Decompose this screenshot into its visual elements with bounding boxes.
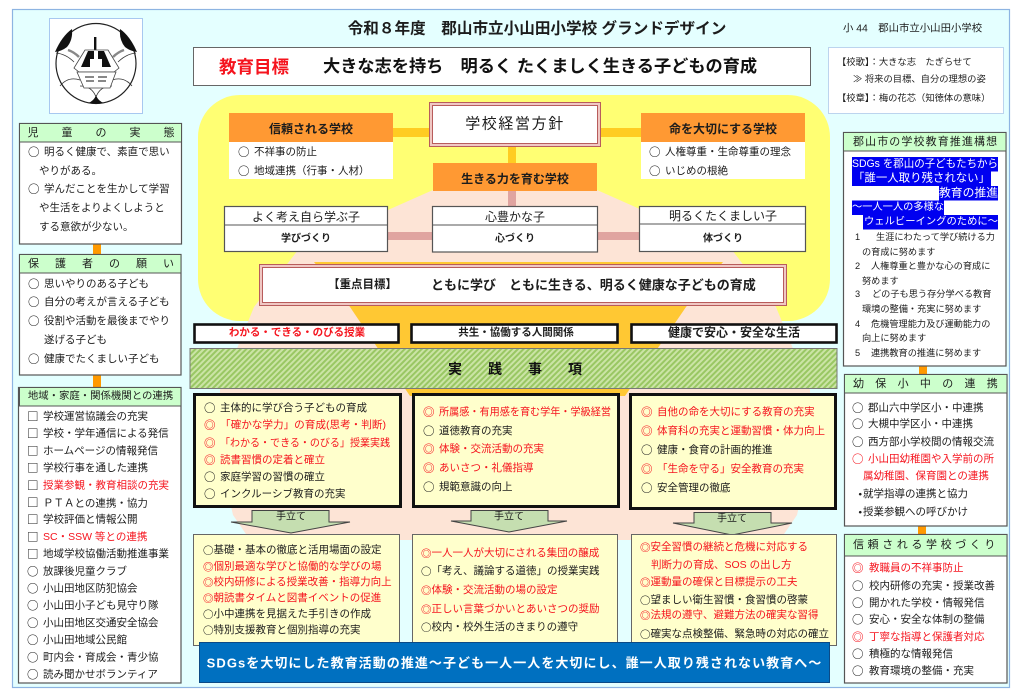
panel: community cooperation: 地域・家庭・関係機関との連携 xyxy=(28,389,173,402)
panel: Koriyama education vision: 郡山市の学校教育推進構想 xyxy=(853,134,998,148)
panel: Koriyama education vision: 人権尊重と豊かな心の育成に xyxy=(871,260,990,271)
panel: trusted school: ○ xyxy=(238,144,250,160)
panel: community cooperation: 小山田小子ども見守り隊 xyxy=(43,599,159,612)
panel: building a trusted school: 教職員の不祥事防止 xyxy=(869,561,964,574)
panel: practice column 2: 道徳教育の充実 xyxy=(439,424,513,437)
panel: preschool to junior high cooperation xyxy=(844,374,1009,526)
panel: practice column 2: 規範意識の向上 xyxy=(439,480,512,493)
panel: measures column 1: ◎個別最適な学びと協働的な学びの場 xyxy=(203,559,382,574)
child box: body: 体づくり xyxy=(703,232,743,244)
panel: community cooperation xyxy=(18,388,181,683)
arrow: measures 1 xyxy=(231,510,350,533)
panel: building a trusted school: 丁寧な指導と保護者対応 xyxy=(869,630,985,643)
panel: building a trusted school: ○ xyxy=(852,612,864,628)
panel: preschool to junior high cooperation: 属幼稚園、保育園との連携 xyxy=(863,469,989,482)
panel: practice column 1: ○ xyxy=(204,486,216,502)
panel: community cooperation: □ xyxy=(27,529,38,545)
panel: practice column 3: ◎ xyxy=(641,423,652,439)
panel: Koriyama education vision xyxy=(844,132,1006,366)
practice items band: 実践事項 xyxy=(448,361,608,377)
SDGs banner: SDGsを大切にした教育活動の推進～子ども一人一人を大切にし、誰一人取り残されない教育へ～ xyxy=(207,656,822,670)
panel: community cooperation: ○ xyxy=(27,580,38,596)
practice items band xyxy=(190,348,837,388)
panel: practice column 1: 主体的に学び合う子どもの育成 xyxy=(220,401,367,414)
panel: building a trusted school: 安心・安全な体制の整備 xyxy=(869,612,985,626)
panel: practice column 1: ◎ xyxy=(204,452,216,468)
child box: heart xyxy=(432,206,598,252)
panel: measures column 2: ◎正しい言葉づかいとあいさつの奨励 xyxy=(421,602,600,616)
panel: parents' wishes: 遂げる子ども xyxy=(44,334,107,346)
panel: measures column 2: ○校内・校外生活のきまりの遵守 xyxy=(421,620,578,634)
panel: parents' wishes: ○ xyxy=(28,313,40,329)
SDGs highlighted statement: ～一人一人の多様な xyxy=(852,200,944,213)
panel: Koriyama education vision: 向上に努めます xyxy=(862,332,926,343)
panel: community cooperation: □ xyxy=(27,546,38,562)
panel: practice column 2: ◎ xyxy=(423,404,434,420)
panel: community cooperation: 読み聞かせボランティア xyxy=(43,668,158,680)
arrow: measures 1: 手立て xyxy=(276,510,306,522)
panel: measures column 1: ○特別支援教育と個別指導の充実 xyxy=(203,622,361,638)
background: gold arrow shape xyxy=(314,262,723,396)
label: relationships: 共生・協働する人間関係 xyxy=(458,326,574,338)
panel: children's current state: 児童の実態 xyxy=(28,126,198,139)
panel: community cooperation: □ xyxy=(27,460,38,476)
panel: practice column 2: あいさつ・礼儀指導 xyxy=(439,461,534,474)
panel: practice column 3: 体育科の充実と運動習慣・体力向上 xyxy=(657,424,825,437)
panel: parents' wishes: 自分の考えが言える子ども xyxy=(44,295,170,308)
panel: community cooperation: ○ xyxy=(27,649,38,665)
panel: community cooperation: 学校運営協議会の充実 xyxy=(43,410,148,422)
child box: body xyxy=(640,206,806,252)
panel: trusted school: 不祥事の防止 xyxy=(254,145,317,158)
SDGs highlighted statement: 教育の推進 xyxy=(939,186,998,200)
panel: community cooperation: 授業参観・教育相談の充実 xyxy=(43,478,169,491)
panel: practice column 3: ○ xyxy=(641,480,652,496)
panel: children's current state: やりがある。 xyxy=(39,164,102,177)
panel: practice column 3: 健康・食育の計画的推進 xyxy=(657,443,773,456)
panel: community cooperation: 学校評価と情報公開 xyxy=(43,513,138,526)
panel: practice column 2: 所属感・有用感を育む学年・学級経営 xyxy=(439,405,611,418)
title: 令和８年度 郡山市立小山田小学校 グランドデザイン xyxy=(348,18,726,38)
panel: Koriyama education vision: 1 xyxy=(855,232,860,242)
panel: children's current state: ○ xyxy=(28,144,40,160)
panel: school valuing life: ○ xyxy=(649,163,660,179)
panel: measures column 1: ◎校内研修による授業改善・指導力向上 xyxy=(203,574,392,590)
panel: practice column 3: ○ xyxy=(641,442,652,458)
panel: practice column 3: ◎ xyxy=(641,461,652,477)
panel: school nurturing zest for living xyxy=(433,163,597,191)
school emblem xyxy=(50,18,142,114)
panel: practice column 3 xyxy=(630,394,836,508)
panel: community cooperation: ○ xyxy=(27,615,38,631)
panel: measures column 3: ○確実な点検整備、緊急時の対応の確立 xyxy=(640,626,829,642)
panel: building a trusted school: ◎ xyxy=(852,629,864,645)
connectors: left panels xyxy=(93,244,101,387)
label: learning: わかる・できる・のびる授業 xyxy=(229,326,366,338)
panel: practice column 2: ○ xyxy=(423,479,434,495)
child box: learning xyxy=(224,206,388,252)
SDGs highlighted statement xyxy=(852,157,998,230)
panel: community cooperation: 小山田地区防犯協会 xyxy=(43,582,138,594)
label: safe life: 健康で安心・安全な生活 xyxy=(668,324,800,340)
panel: community cooperation: 放課後児童クラブ xyxy=(43,564,127,577)
panel: parents' wishes: ○ xyxy=(28,351,40,367)
panel: measures column 3: 判断力の育成、SOS の出し方 xyxy=(651,558,792,571)
panel: measures column 3: ◎運動量の確保と目標提示の工夫 xyxy=(640,574,798,590)
panel: children's current state: ○ xyxy=(28,181,40,197)
panel: practice column 1: ○ xyxy=(204,469,216,485)
panel: Koriyama education vision: 環境の整備・充実に努めます xyxy=(862,303,981,314)
panel: building a trusted school: ◎ xyxy=(852,560,864,576)
panel: building a trusted school: ○ xyxy=(852,578,864,594)
panel: measures column 1: ◎朝読書タイムと図書イベントの促進 xyxy=(203,590,382,606)
panel: measures column 3: ◎安全習慣の継続と危機に対応する xyxy=(640,540,808,554)
panel: building a trusted school xyxy=(844,534,1007,683)
background: yellow rounded area xyxy=(198,95,830,321)
school song and emblem note: 【校章】：梅の花芯（知徳体の意味） xyxy=(837,92,990,103)
priority goal: ともに学び ともに生きる、明るく健康な子どもの育成 xyxy=(431,278,756,292)
label: safe life xyxy=(632,324,836,342)
panel: practice column 1: 家庭学習の習慣の確立 xyxy=(220,470,325,483)
panel: community cooperation: 小山田地区交通安全協会 xyxy=(43,616,159,629)
panel: trusted school: 信頼される学校 xyxy=(269,121,353,136)
panel: practice column 1: ○ xyxy=(204,400,216,416)
panel: preschool to junior high cooperation: 幼保小中の連携 xyxy=(853,376,1009,390)
panel: Koriyama education vision: 連携教育の推進に努めます xyxy=(871,347,981,358)
panel: parents' wishes: 役割や活動を最後までやり xyxy=(44,314,170,327)
panel: community cooperation: ホームページの情報発信 xyxy=(43,444,158,457)
panel: Koriyama education vision: 生涯にわたって学び続ける力 xyxy=(876,231,995,242)
panel: building a trusted school: 信頼される学校づくり xyxy=(853,537,999,551)
panel: community cooperation: ○ xyxy=(27,598,38,614)
connectors: right panels xyxy=(918,366,927,535)
panel: Koriyama education vision: どの子も思う存分学べる教育 xyxy=(872,288,991,299)
child box: heart: 心づくり xyxy=(495,232,535,244)
panel: community cooperation: □ xyxy=(27,426,38,442)
school management policy: 学校経営方針 xyxy=(465,116,565,132)
educational goal box xyxy=(194,48,810,86)
panel: measures column 2: ◎一人一人が大切にされる集団の醸成 xyxy=(421,546,600,560)
panel: preschool to junior high cooperation: 小山田幼稚園や入学前の所 xyxy=(868,452,994,465)
panel: preschool to junior high cooperation: 郡山六中学区小・中連携 xyxy=(868,401,984,414)
panel: practice column 2: ◎ xyxy=(423,460,434,476)
connectors: child boxes xyxy=(387,191,640,240)
panel: practice column 1: ◎ xyxy=(204,417,216,433)
SDGs highlighted statement: ウェルビーイングのために～ xyxy=(864,214,998,228)
educational goal box: 大きな志を持ち 明るく たくましく生きる子どもの育成 xyxy=(323,56,757,76)
panel: parents' wishes: 健康でたくましい子ども xyxy=(44,352,160,365)
educational goal box: 教育目標 xyxy=(219,57,289,77)
panel: measures column 1: ○小中連携を見据えた手引きの作成 xyxy=(203,606,371,622)
priority goal xyxy=(260,264,786,306)
panel: parents' wishes xyxy=(20,254,190,375)
panel: practice column 1: 読書習慣の定着と確立 xyxy=(220,453,325,466)
arrow: measures 2 xyxy=(451,510,567,532)
panel: preschool to junior high cooperation: 大槻中学区小・中連携 xyxy=(868,417,973,430)
panel: community cooperation: 地域学校協働活動推進事業 xyxy=(43,547,169,560)
label: relationships xyxy=(412,324,618,342)
panel: community cooperation: ○ xyxy=(27,632,38,648)
panel: children's current state: する意欲が少ない。 xyxy=(39,220,134,233)
panel: community cooperation: □ xyxy=(27,443,38,459)
panel: measures column 3 xyxy=(632,534,836,646)
panel: Koriyama education vision: 2 xyxy=(855,261,860,271)
panel: measures column 1 xyxy=(194,534,400,646)
label: learning xyxy=(194,324,398,342)
panel: Koriyama education vision: 5 xyxy=(855,348,860,358)
panel: building a trusted school: 教育環境の整備・充実 xyxy=(869,664,974,677)
panel: building a trusted school: 校内研修の充実・授業改善 xyxy=(869,579,995,592)
panel: building a trusted school: 開かれた学校・情報発信 xyxy=(869,596,985,609)
panel: preschool to junior high cooperation: ・ xyxy=(855,486,866,502)
school song and emblem note: ≫ 将来の目標、自分の理想の姿 xyxy=(853,73,986,84)
panel: practice column 3: 安全管理の徹底 xyxy=(657,481,731,494)
panel: community cooperation: 学校・学年通信による発信 xyxy=(43,427,169,440)
panel: preschool to junior high cooperation: 西方部小学校間の情報交流 xyxy=(868,435,994,448)
school song and emblem note xyxy=(828,48,1004,114)
panel: community cooperation: 町内会・育成会・青少協 xyxy=(43,650,158,663)
panel: parents' wishes: 思いやりのある子ども xyxy=(44,278,149,290)
panel: community cooperation: ＰＴＡとの連携・協力 xyxy=(43,495,148,510)
panel: Koriyama education vision: 4 xyxy=(855,319,860,329)
panel: community cooperation: 学校行事を通した連携 xyxy=(43,461,148,474)
panel: preschool to junior high cooperation: ○ xyxy=(852,434,864,450)
panel: trusted school: 地域連携（行事・人材） xyxy=(254,164,370,177)
school code: 小 44 郡山市立小山田小学校 xyxy=(843,22,983,34)
child box: learning: 学びづくり xyxy=(281,232,331,244)
panel: practice column 1: 「わかる・できる・のびる」授業実践 xyxy=(220,436,390,449)
panel: measures column 2: ○「考え、議論する道徳」の授業実践 xyxy=(421,564,600,578)
panel: practice column 1: インクルーシブ教育の充実 xyxy=(220,487,346,500)
panel: community cooperation: □ xyxy=(27,512,38,528)
arrow: measures 3: 手立て xyxy=(717,512,747,524)
panel: Koriyama education vision: 努めます xyxy=(862,275,899,286)
arrow: measures 2: 手立て xyxy=(494,510,524,522)
panel: parents' wishes: ○ xyxy=(28,294,40,310)
panel: practice column 3: 「生命を守る」安全教育の充実 xyxy=(657,462,804,475)
panel: measures column 1: ○基礎・基本の徹底と活用場面の設定 xyxy=(203,542,382,558)
panel: children's current state xyxy=(20,124,198,244)
panel: preschool to junior high cooperation: ○ xyxy=(852,416,864,432)
panel: school valuing life: いじめの根絶 xyxy=(665,164,728,177)
panel: children's current state: 学んだことを生かして学習 xyxy=(44,182,170,195)
panel: practice column 3: 自他の命を大切にする教育の充実 xyxy=(657,405,815,418)
panel: practice column 3: ◎ xyxy=(641,404,652,420)
panel: practice column 2: ◎ xyxy=(423,441,434,457)
panel: practice column 1: 「確かな学力」の育成(思考・判断) xyxy=(220,418,386,431)
panel: community cooperation: □ xyxy=(27,494,38,510)
panel: practice column 2 xyxy=(414,394,618,506)
child box: body: 明るくたくましい子 xyxy=(669,209,777,223)
panel: Koriyama education vision: 危機管理能力及び運動能力の xyxy=(871,318,990,329)
connectors: school policy xyxy=(393,128,642,164)
panel: practice column 2: 体験・交流活動の充実 xyxy=(439,442,544,455)
panel: building a trusted school: ○ xyxy=(852,646,864,662)
panel: children's current state: 明るく健康で、素直で思い xyxy=(44,145,170,158)
child box: learning: よく考え自ら学ぶ子 xyxy=(252,209,360,224)
panel: practice column 2: ○ xyxy=(423,423,434,439)
panel: measures column 3: ◎法規の遵守、避難方法の確実な習得 xyxy=(640,608,818,622)
arrow: measures 3 xyxy=(673,512,792,535)
panel: parents' wishes: 保護者の願い xyxy=(28,256,190,270)
panel: preschool to junior high cooperation: ・ xyxy=(855,504,866,520)
panel: measures column 3: ○望ましい衛生習慣・食習慣の啓蒙 xyxy=(640,592,808,608)
panel: building a trusted school: ○ xyxy=(852,595,864,611)
panel: trusted school xyxy=(229,113,393,179)
panel: trusted school: ○ xyxy=(238,163,250,179)
panel: practice column 1: ◎ xyxy=(204,435,216,451)
panel: Koriyama education vision: の育成に努めます xyxy=(862,246,936,257)
panel: community cooperation: 小山田地域公民館 xyxy=(43,633,127,646)
school management policy xyxy=(430,102,600,146)
panel: school valuing life xyxy=(641,113,805,179)
priority goal: 【重点目標】 xyxy=(328,277,397,291)
panel: community cooperation: □ xyxy=(27,477,38,493)
panel: preschool to junior high cooperation: ○ xyxy=(852,451,864,467)
SDGs highlighted statement: SDGs を郡山の子どもたちから xyxy=(852,158,998,170)
panel: community cooperation: □ xyxy=(27,408,38,424)
panel: preschool to junior high cooperation: ○ xyxy=(852,400,864,416)
school song and emblem note: 【校歌】：大きな志 たぎらせて xyxy=(837,56,972,67)
panel: building a trusted school: ○ xyxy=(852,663,864,679)
panel: school valuing life: 命を大切にする学校 xyxy=(669,121,777,136)
panel: preschool to junior high cooperation: 授業参観への呼びかけ xyxy=(863,505,968,518)
panel: Koriyama education vision: 3 xyxy=(855,289,860,299)
panel: building a trusted school: 積極的な情報発信 xyxy=(869,647,953,660)
SDGs banner xyxy=(200,642,830,682)
panel: preschool to junior high cooperation: 就学指導の連携と協力 xyxy=(863,487,968,500)
panel: school nurturing zest for living: 生きる力を育む学校 xyxy=(461,171,569,186)
panel: community cooperation: SC・SSW 等との連携 xyxy=(43,530,147,543)
panel: school valuing life: 人権尊重・生命尊重の理念 xyxy=(665,145,791,158)
child box: heart: 心豊かな子 xyxy=(485,210,545,224)
panel: community cooperation: ○ xyxy=(27,563,38,579)
SDGs highlighted statement: 「誰一人取り残されない」 xyxy=(853,170,990,184)
panel: community cooperation: ○ xyxy=(27,666,38,682)
panel: measures column 2: ◎体験・交流活動の場の設定 xyxy=(421,582,558,598)
panel: school valuing life: ○ xyxy=(649,144,660,160)
panel: children's current state: や生活をよりよくしようと xyxy=(39,201,165,214)
panel: measures column 2 xyxy=(412,534,618,646)
panel: practice column 1 xyxy=(194,394,400,506)
panel: parents' wishes: ○ xyxy=(28,276,40,292)
background: pink octagon xyxy=(218,190,812,540)
